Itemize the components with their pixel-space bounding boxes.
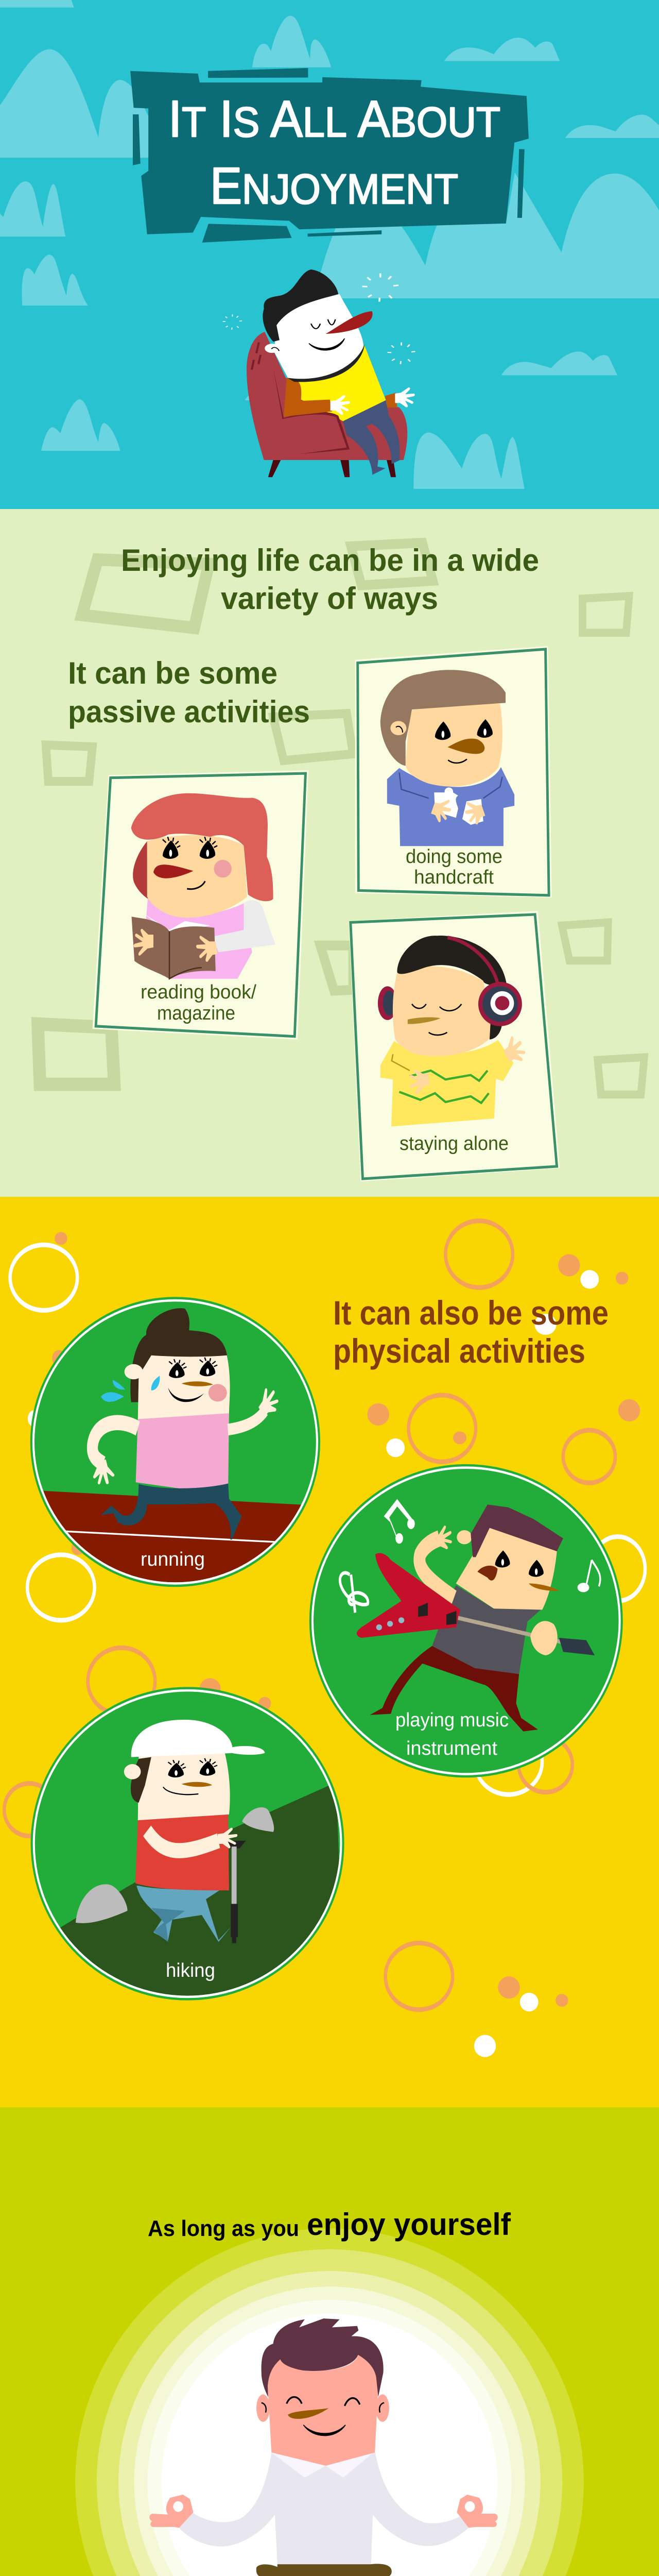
- meditating character: [149, 2318, 498, 2576]
- section heading: Enjoying life can be in a wide: [121, 543, 539, 578]
- section background: [0, 2107, 659, 2576]
- title banner: [130, 68, 529, 243]
- card label: [141, 981, 256, 1024]
- title: [168, 90, 500, 215]
- background mountains: [0, 0, 659, 489]
- section heading: variety of ways: [221, 581, 438, 616]
- title: IT IS ALL ABOUT: [168, 90, 500, 148]
- background squares: [38, 543, 644, 1094]
- card: doing some handcraft: [355, 646, 552, 897]
- card label: doing some: [406, 846, 502, 868]
- card label: [406, 846, 502, 888]
- panel: hero: [0, 0, 659, 509]
- card label: magazine: [157, 1003, 235, 1024]
- panel: enjoy yourself: [0, 2107, 659, 2576]
- glow rings: [75, 2228, 584, 2576]
- section heading: It can also be some: [333, 1294, 609, 1332]
- card label: staying alone: [400, 1133, 509, 1155]
- title: ENJOYMENT: [210, 157, 458, 215]
- card: reading book or magazine: [93, 770, 308, 1040]
- subheading: [68, 656, 310, 729]
- opening statement: As long as you: [148, 2216, 299, 2241]
- character relaxing in armchair: [247, 269, 415, 477]
- opening statement: enjoy yourself: [307, 2207, 511, 2242]
- card label: handcraft: [414, 867, 494, 888]
- circle label: [395, 1709, 509, 1759]
- circle: hiking: [25, 1687, 344, 2019]
- opening statement: [148, 2207, 511, 2242]
- decorative bubbles: [4, 1221, 645, 2057]
- section background: [0, 509, 659, 1197]
- card label: reading book/: [141, 981, 256, 1003]
- subheading: passive activities: [68, 694, 310, 729]
- section heading: physical activities: [333, 1332, 585, 1370]
- circle label: hiking: [166, 1960, 215, 1981]
- section heading: [121, 543, 539, 616]
- circle: running: [25, 1297, 320, 1609]
- circle: playing music instrument: [309, 1464, 623, 1777]
- circle label: instrument: [406, 1738, 497, 1759]
- hero background: [0, 0, 659, 509]
- card: staying alone: [349, 911, 560, 1181]
- section heading: [333, 1294, 609, 1370]
- circle label: running: [141, 1549, 205, 1570]
- panel: passive activities: [0, 509, 659, 1197]
- circle label: playing music: [395, 1709, 509, 1731]
- section background: [0, 1197, 659, 2107]
- subheading: It can be some: [68, 656, 278, 690]
- sparkles: [223, 274, 415, 364]
- panel: physical activities: [0, 1197, 659, 2107]
